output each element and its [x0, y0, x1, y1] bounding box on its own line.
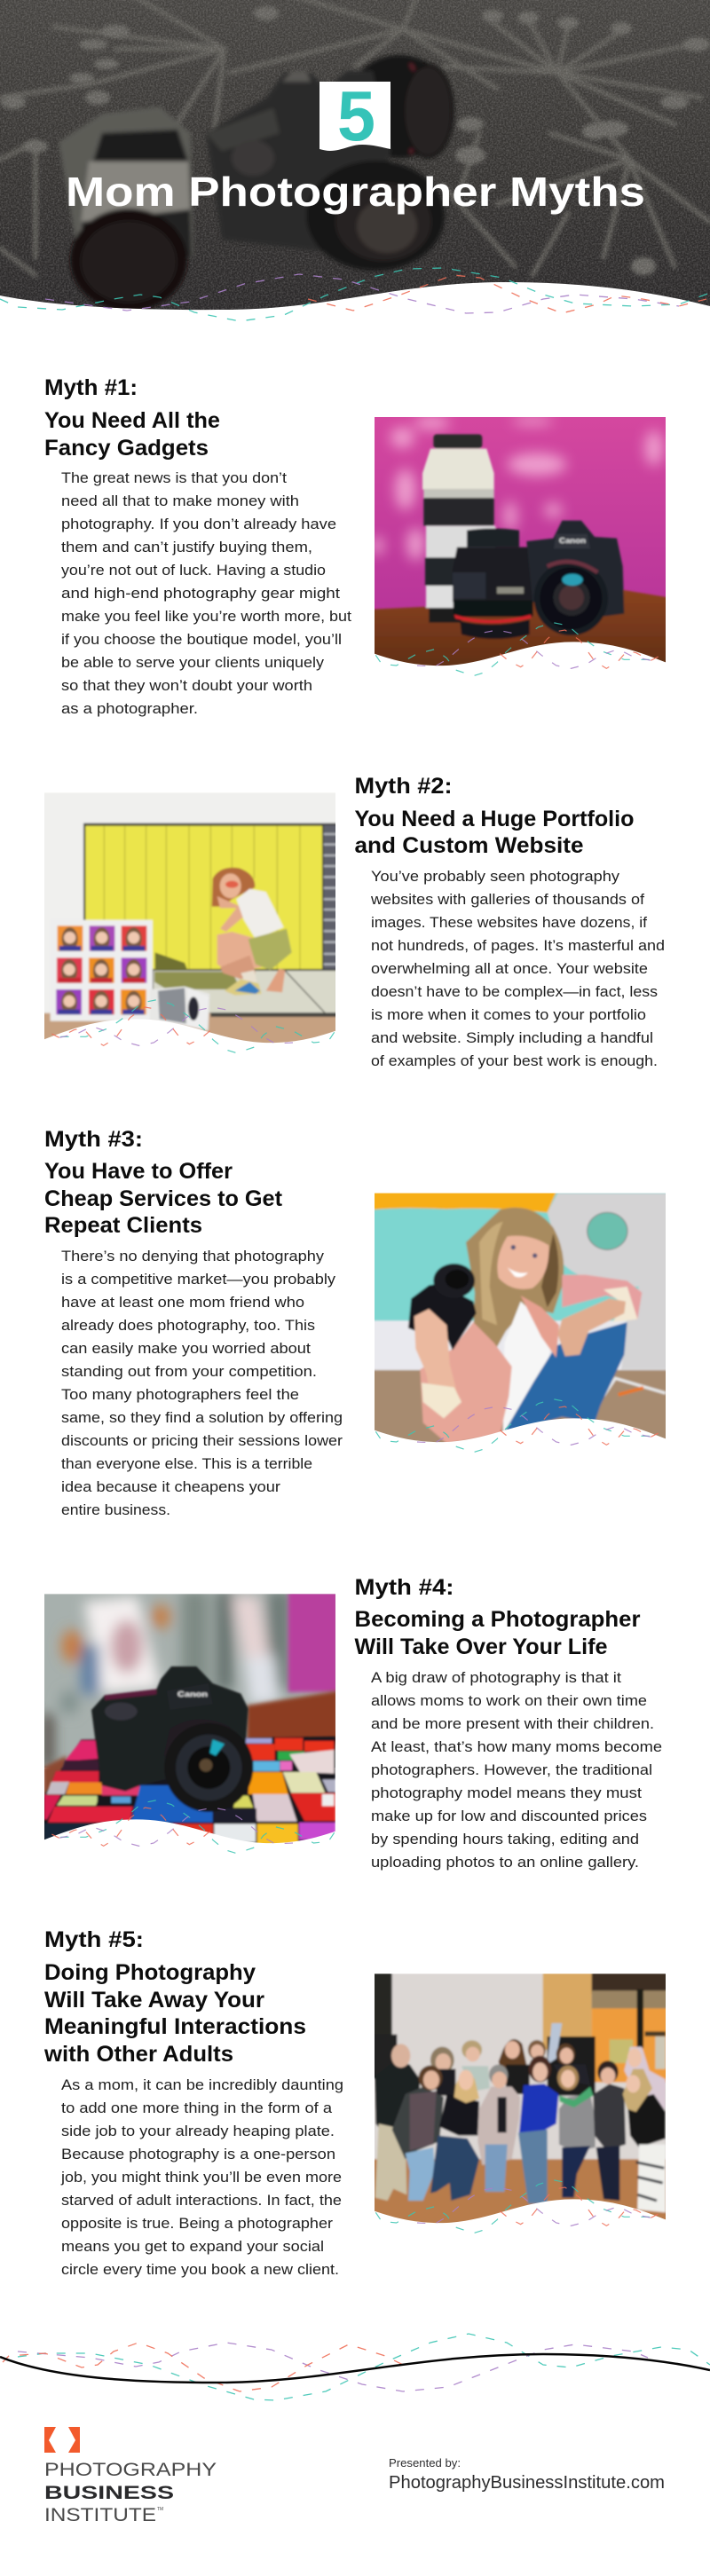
- panel: myth 5: [43, 1927, 668, 2278]
- body text: and be more present with their children.: [371, 1716, 654, 1732]
- hair: [466, 1208, 564, 1358]
- heading: You Have to Offer: [44, 1159, 233, 1184]
- body text: [370, 869, 665, 1069]
- body text: You’ve probably seen photography: [371, 869, 620, 885]
- body text: same, so they find a solution by offering: [61, 1410, 343, 1426]
- body text: circle every time you book a new client.: [61, 2262, 339, 2278]
- hero banner: [0, 0, 710, 321]
- body text: [60, 2077, 343, 2278]
- heading: Will Take Away Your: [44, 1988, 264, 2013]
- body text: The great news is that you don’t: [61, 470, 287, 486]
- heading: Cheap Services to Get: [44, 1186, 283, 1211]
- forearm and hand: [557, 1298, 626, 1356]
- long lens: [59, 106, 193, 266]
- body text: of examples of your best work is enough.: [371, 1053, 658, 1069]
- body text: make up for low and discounted prices: [371, 1808, 647, 1824]
- hero photo: cameras on carpet: [0, 0, 710, 312]
- body text: photography. If you don’t already have: [61, 516, 336, 532]
- body text: websites with galleries of thousands of: [370, 892, 644, 908]
- heading: You Need a Huge Portfolio: [355, 807, 634, 831]
- title: Mom Photographer Myths: [66, 169, 645, 215]
- logo: Photography Business Institute: [44, 2427, 217, 2525]
- logo: Photography Business Institute: INSTITUTE: [44, 2505, 156, 2525]
- heading: Meaningful Interactions: [44, 2014, 306, 2039]
- photo: camera on colourful box: Canon: [178, 1690, 208, 1698]
- photo: woman crouching by yellow wall: [42, 790, 338, 1058]
- heading: [43, 1927, 306, 2067]
- body text: [61, 1249, 343, 1518]
- panel: myth 2: [42, 774, 665, 1069]
- body text: make you feel like you’re worth more, but: [61, 609, 351, 625]
- number badge: [320, 76, 390, 155]
- heading: Myth #3:: [44, 1127, 143, 1152]
- heading: Doing Photography: [44, 1960, 256, 1985]
- body text: [371, 1670, 662, 1871]
- body text: opposite is true. Being a photographer: [61, 2216, 334, 2232]
- body text: be able to serve your clients uniquely: [61, 655, 325, 671]
- body text: already does photography, too. This: [61, 1318, 315, 1334]
- photo: camera on colourful box: [42, 1590, 338, 1858]
- heading: [44, 375, 220, 461]
- holding hand: [412, 1307, 456, 1388]
- body text: As a mom, it can be incredibly daunting: [61, 2077, 343, 2093]
- presented by credit: Presented by:: [389, 2456, 461, 2470]
- body text: standing out from your competition.: [61, 1364, 317, 1380]
- face: [497, 1236, 548, 1289]
- logo: Photography Business Institute: PHOTOGRAPHY: [44, 2460, 217, 2480]
- body text: and website. Simply including a handful: [371, 1030, 653, 1046]
- body text: means you get to expand your social: [61, 2239, 324, 2255]
- number badge: 5: [337, 76, 375, 155]
- body text: idea because it cheapens your: [61, 1479, 281, 1495]
- woman: [212, 868, 255, 907]
- body text: There’s no denying that photography: [61, 1249, 325, 1264]
- wave dashes over hero: [0, 268, 710, 321]
- rear lens: [360, 52, 428, 161]
- heading: You Need All the: [44, 408, 220, 433]
- body text: can easily make you worried about: [61, 1341, 311, 1357]
- camera body: [206, 71, 390, 257]
- body text: entire business.: [61, 1502, 170, 1518]
- body text: doesn’t have to be complex—in fact, less: [371, 984, 658, 1000]
- body text: overwhelming all at once. Your website: [371, 961, 648, 977]
- body text: by spending hours taking, editing and: [371, 1832, 639, 1847]
- camera: [408, 1284, 477, 1351]
- heading: Myth #2:: [355, 774, 453, 799]
- body text: as a photographer.: [61, 701, 198, 717]
- photo: group of women: [373, 1970, 668, 2238]
- body text: have at least one mom friend who: [61, 1295, 304, 1311]
- body text: photography model means they must: [371, 1785, 642, 1801]
- camera: [91, 1666, 248, 1792]
- heading: [355, 774, 634, 858]
- heading: and Custom Website: [355, 833, 584, 858]
- body text: uploading photos to an online gallery.: [371, 1855, 639, 1871]
- icon: orange brackets: [44, 2427, 80, 2453]
- body text: side job to your already heaping plate.: [61, 2123, 335, 2139]
- heading: Myth #5:: [44, 1927, 144, 1952]
- body text: and high-end photography gear might: [61, 586, 340, 602]
- body text: than everyone else. This is a terrible: [61, 1456, 312, 1472]
- logo: Photography Business Institute: TM: [157, 2507, 163, 2512]
- body text: them and can’t justify buying them,: [61, 540, 312, 555]
- body text: Too many photographers feel the: [61, 1387, 299, 1403]
- heading: Will Take Over Your Life: [355, 1635, 608, 1659]
- body text: At least, that’s how many moms become: [371, 1739, 662, 1755]
- body text: [61, 470, 351, 717]
- body text: discounts or pricing their sessions lower: [61, 1433, 343, 1449]
- tee: [503, 1302, 553, 1435]
- photo: smiling woman with camera: [373, 1189, 668, 1457]
- photo: lenses and camera on table: Canon: [559, 536, 586, 545]
- heading: with Other Adults: [43, 2042, 233, 2067]
- heading: Repeat Clients: [44, 1213, 202, 1238]
- body text: is more when it comes to your portfolio: [371, 1007, 646, 1023]
- heading: [355, 1575, 641, 1659]
- heading: Fancy Gadgets: [44, 436, 209, 461]
- heading: Becoming a Photographer: [355, 1607, 641, 1632]
- footer wave divider: [0, 2334, 710, 2400]
- heading: [44, 1127, 283, 1238]
- body text: job, you might think you’ll be even more: [60, 2170, 342, 2186]
- heading: Myth #1:: [44, 375, 138, 400]
- poster grid: [51, 920, 153, 1021]
- logo: Photography Business Institute: BUSINESS: [44, 2483, 174, 2503]
- photo: lenses and camera on table: [371, 413, 668, 681]
- body text: you’re not out of luck. Having a studio: [61, 563, 326, 579]
- body text: if you choose the boutique model, you’ll: [61, 632, 342, 648]
- body text: not hundreds, of pages. It’s masterful and: [371, 938, 665, 954]
- book: [150, 987, 209, 1031]
- body text: A big draw of photography is that it: [371, 1670, 621, 1686]
- body text: so that they won’t doubt your worth: [61, 678, 312, 694]
- panel: myth 1: [44, 375, 668, 717]
- body text: images. These websites have dozens, if: [371, 915, 647, 931]
- back row: [375, 2063, 422, 2128]
- panel: myth 4: [42, 1575, 662, 1871]
- panel: myth 3: [44, 1127, 668, 1518]
- body text: Because photography is a one-person: [61, 2147, 335, 2162]
- heading: Myth #4:: [355, 1575, 454, 1600]
- jeans: [503, 1322, 627, 1435]
- plaid shirt: [420, 1322, 512, 1444]
- body text: to add one more thing in the form of a: [61, 2100, 333, 2116]
- body text: photographers. However, the traditional: [371, 1762, 652, 1778]
- body text: is a competitive market—you probably: [61, 1272, 336, 1288]
- body text: allows moms to work on their own time: [371, 1693, 647, 1709]
- body text: starved of adult interactions. In fact, the: [61, 2193, 342, 2209]
- front row: [392, 2087, 444, 2159]
- front lens: [306, 161, 445, 271]
- body text: need all that to make money with: [61, 493, 299, 509]
- presented by credit: [389, 2456, 665, 2493]
- presented by credit: PhotographyBusinessInstitute.com: [389, 2473, 665, 2493]
